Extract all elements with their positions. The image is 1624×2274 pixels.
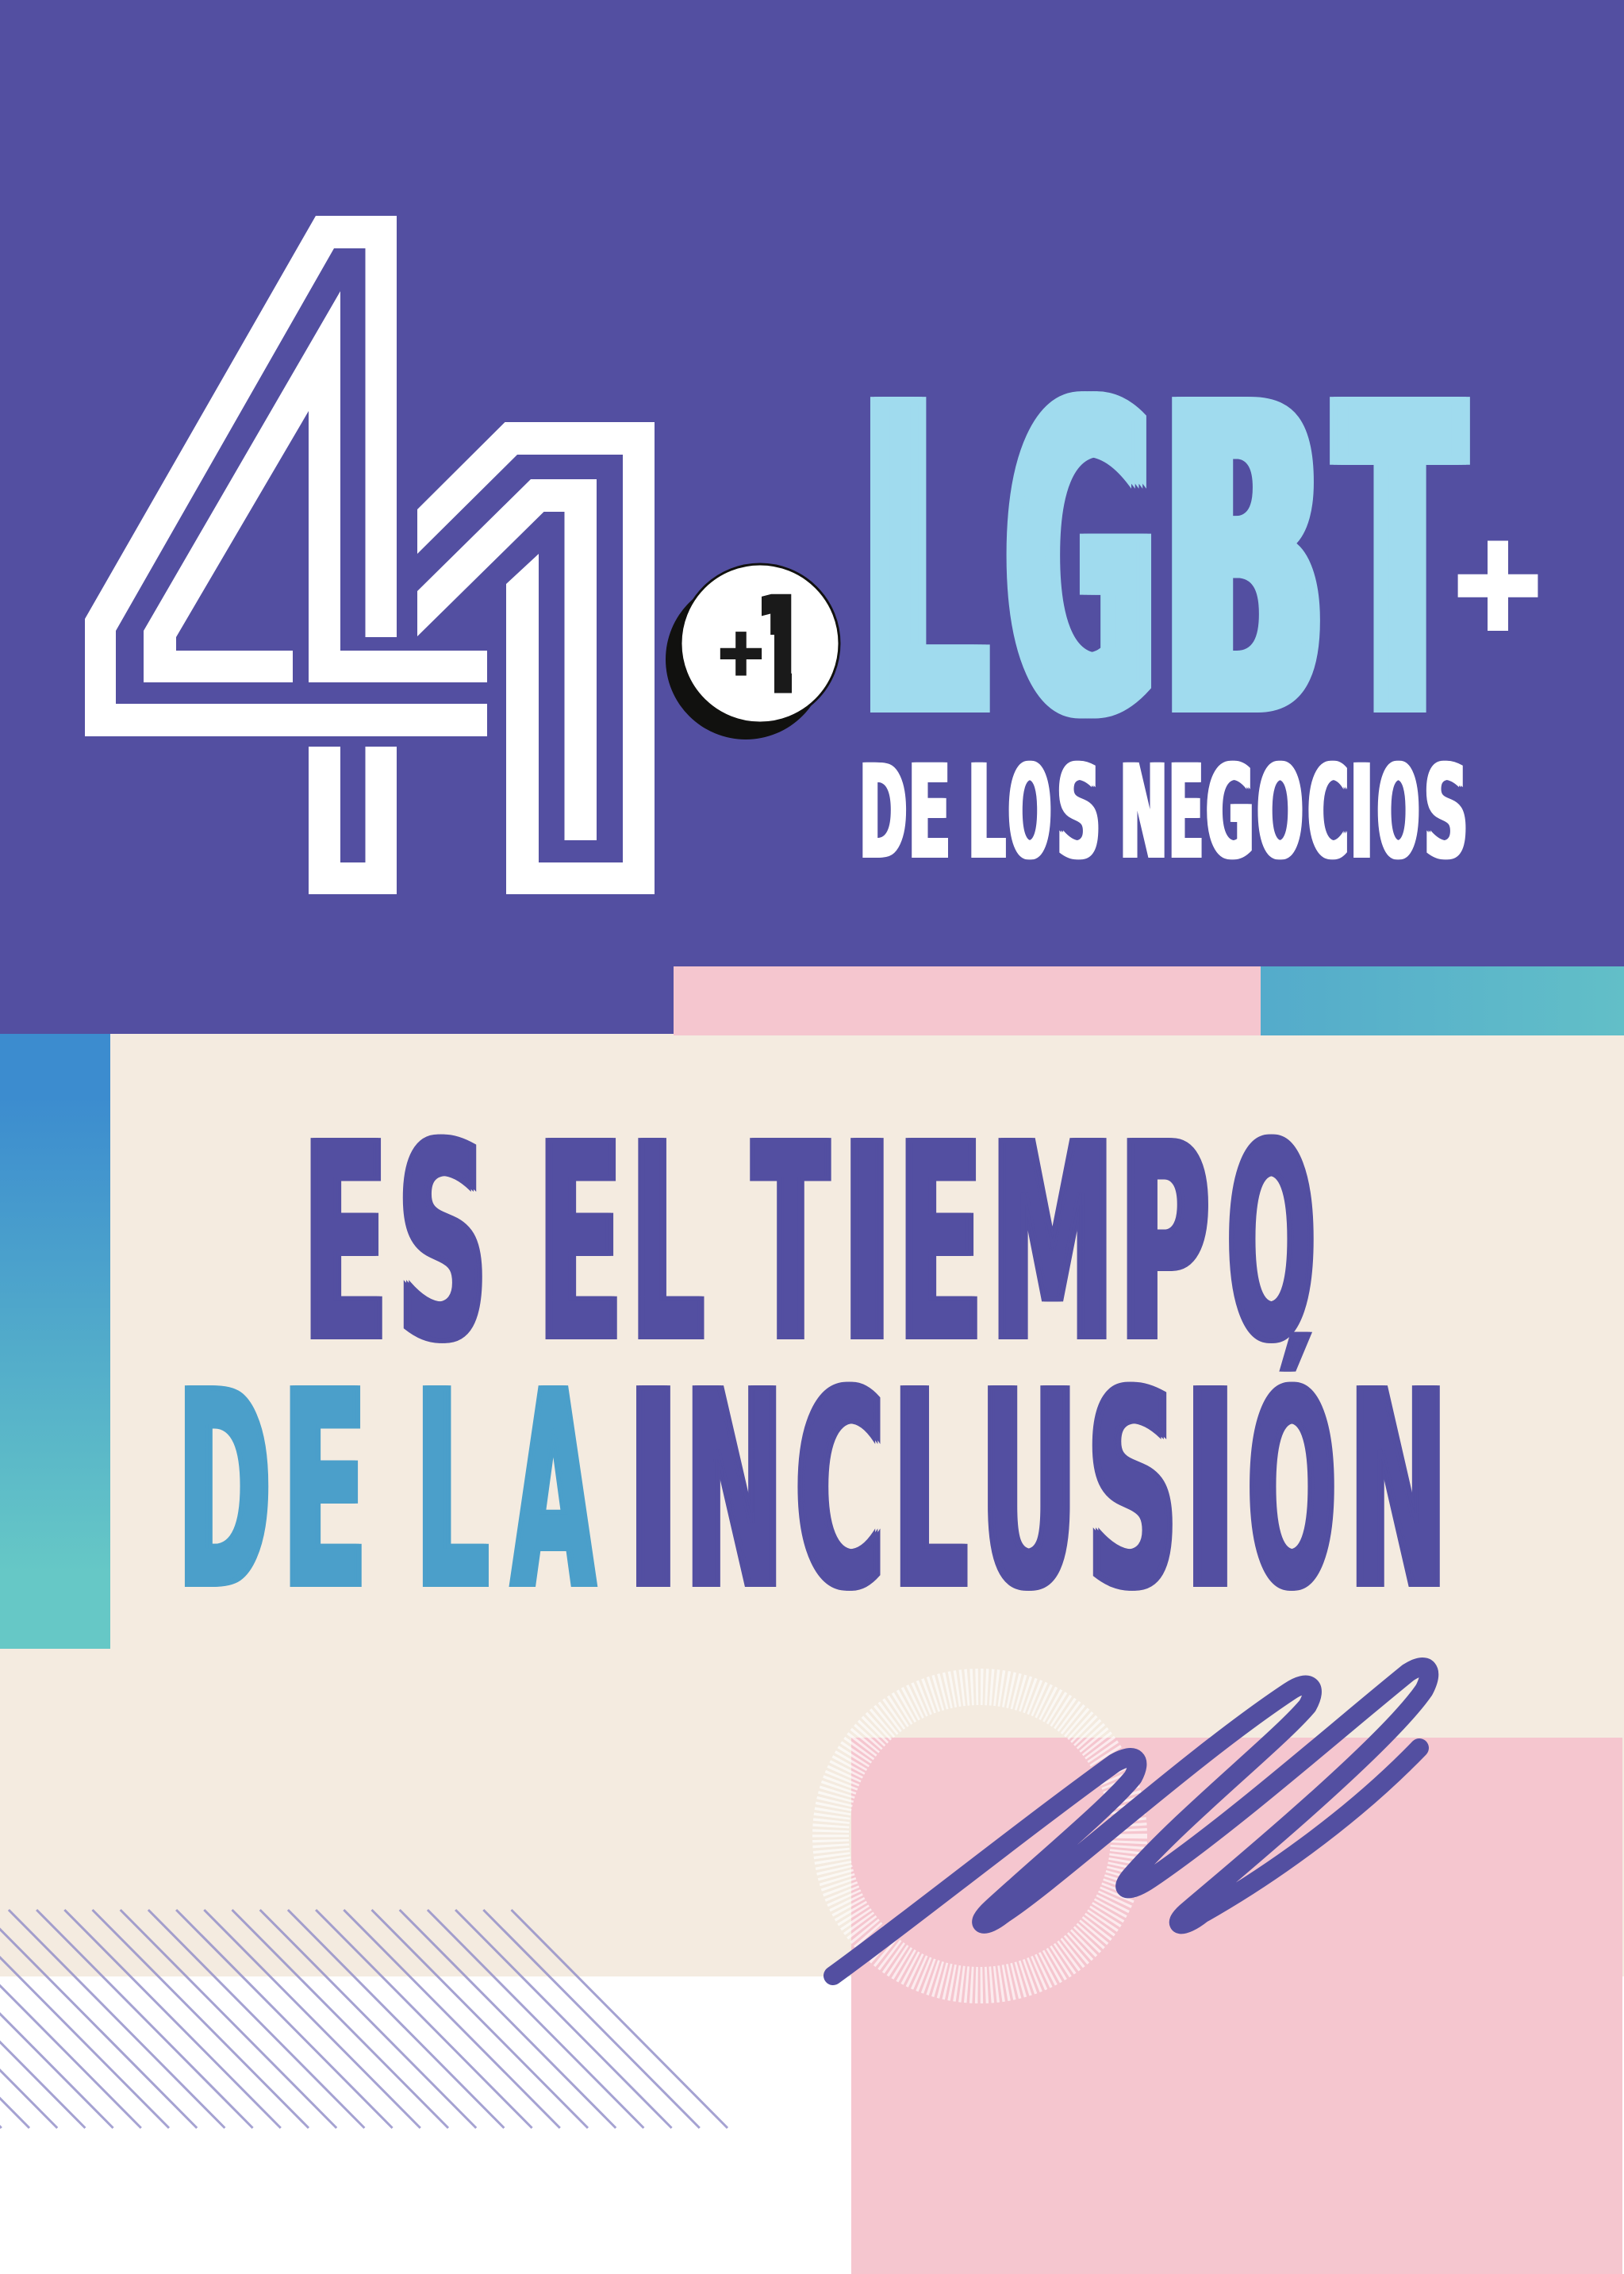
logo: 41 numeral	[85, 216, 655, 894]
decorative hatch lines	[0, 1910, 728, 2128]
title: line two: L	[893, 1335, 967, 1649]
pink header block	[674, 966, 1261, 1035]
subheading: de los negocios: I	[1350, 739, 1373, 888]
subheading: de los negocios: S	[1057, 739, 1100, 888]
subheading: de los negocios: N	[1120, 739, 1168, 888]
heading: LGBT: B	[1163, 317, 1324, 809]
subheading: de los negocios: E	[908, 739, 950, 888]
title: line two: U	[981, 1335, 1077, 1649]
gradient side bar	[0, 1034, 110, 1649]
title: line two accent: L	[416, 1335, 489, 1649]
title: line two accent: D	[178, 1335, 271, 1649]
title: line two accent: E	[282, 1335, 367, 1649]
subheading: de los negocios: D	[859, 739, 907, 888]
panel: cream background	[0, 1034, 1624, 1976]
title: line two: Ó	[1247, 1331, 1336, 1649]
title: line two: I	[628, 1335, 679, 1649]
badge: +1	[666, 564, 839, 739]
title: line one: E	[898, 1087, 983, 1401]
badge: +1: +	[716, 616, 766, 689]
text: O	[1227, 1087, 1315, 1401]
decorative radial ring	[831, 1687, 1129, 1985]
heading: LGBT: L	[862, 317, 985, 809]
title: line one: M	[991, 1087, 1114, 1401]
text: N	[1349, 1335, 1447, 1649]
title: line two: I	[1184, 1335, 1236, 1649]
subheading: de los negocios: C	[1307, 739, 1349, 888]
text: S	[1424, 739, 1468, 888]
badge: +1: 1	[742, 569, 815, 724]
panel: bottom white background	[0, 1976, 1624, 2274]
title: line one: P	[1119, 1087, 1210, 1401]
heading: LGBT: G	[1007, 317, 1155, 809]
title: line one: T	[753, 1087, 829, 1401]
title: line one: S	[397, 1087, 488, 1401]
subheading: de los negocios: L	[968, 739, 1005, 888]
scribble	[833, 1667, 1429, 1976]
panel: purple header	[0, 0, 1624, 1034]
subheading: de los negocios: O	[1377, 739, 1419, 888]
text: A	[512, 1335, 595, 1649]
heading: plus sign: +	[1449, 505, 1547, 658]
title: line one: E	[303, 1087, 388, 1401]
title: line two: C	[795, 1335, 885, 1649]
subheading: de los negocios: O	[1008, 739, 1051, 888]
subheading: de los negocios: O	[1257, 739, 1303, 888]
subheading: de los negocios: E	[1169, 739, 1204, 888]
subheading: de los negocios: G	[1206, 739, 1254, 888]
teal gradient header block	[1261, 966, 1624, 1035]
title: line one: L	[631, 1087, 704, 1401]
title: line one: I	[843, 1087, 892, 1401]
text: T	[1338, 317, 1463, 809]
title: line one: E	[538, 1087, 623, 1401]
title: line two: S	[1087, 1335, 1178, 1649]
title: line two: N	[685, 1335, 784, 1649]
pink bottom block	[851, 1738, 1622, 2274]
